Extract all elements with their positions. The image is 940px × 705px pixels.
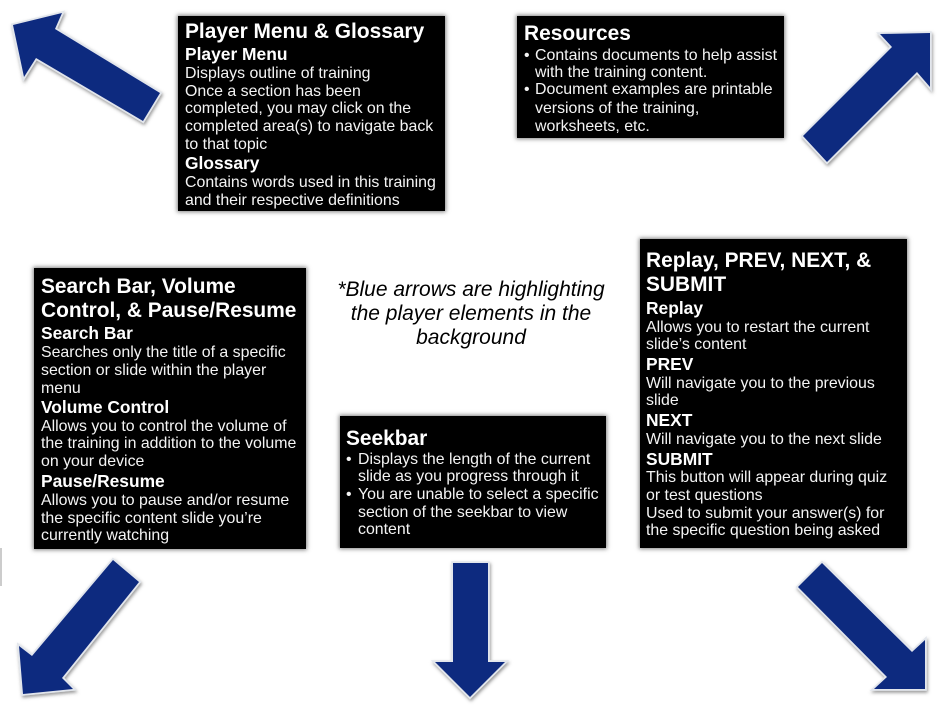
- text: pause/resume description: Allows you to pause and/or resume: [41, 492, 289, 509]
- bullet list: seekbar: slide as you progress through it: [358, 468, 579, 485]
- text: submit description: the specific question being asked: [646, 522, 880, 539]
- text: submit description: [646, 469, 887, 539]
- bullet list: seekbar: content: [358, 521, 410, 538]
- panel: Player Menu & Glossary: [178, 16, 445, 211]
- panel: Replay, PREV, NEXT, & SUBMIT: [640, 239, 907, 548]
- bullet list: resources: with the training content.: [535, 64, 707, 81]
- text: pause/resume description: currently watching: [41, 527, 169, 544]
- text: next description: Will navigate you to the next slide: [646, 431, 882, 448]
- heading: Player Menu & Glossary: Player Menu & Glossary: [185, 20, 424, 43]
- text: volume control description: on your device: [41, 453, 144, 470]
- bullet list: resources: [524, 47, 777, 135]
- bullet list: resources: worksheets, etc.: [535, 118, 650, 135]
- text: player menu description: completed, you may click on the: [185, 100, 411, 117]
- text: glossary description: and their respective definitions: [185, 192, 400, 209]
- arrow: bottom right: [798, 563, 925, 689]
- bullet list: seekbar: •: [346, 486, 352, 503]
- arrow: top left: [13, 13, 160, 121]
- text: submit description: Used to submit your answer(s) for: [646, 505, 884, 522]
- bullet list: resources: versions of the training,: [535, 100, 699, 117]
- subheading: Replay: Replay: [646, 298, 703, 318]
- text: submit description: This button will appear during quiz: [646, 469, 887, 486]
- heading: Resources: Resources: [524, 22, 631, 45]
- bullet list: resources: Contains documents to help assist: [535, 47, 777, 64]
- text: player menu description: Displays outline of training: [185, 65, 370, 82]
- text: search bar description: section or slide within the player: [41, 362, 266, 379]
- heading: Search Bar, Volume Control, & Pause/Resume: [41, 275, 296, 322]
- bullet list: seekbar: You are unable to select a specific: [358, 486, 599, 503]
- heading: Replay, PREV, NEXT, & SUBMIT: [646, 249, 871, 296]
- bullet list: resources: •: [524, 47, 530, 64]
- text: pause/resume description: the specific content slide you’re: [41, 510, 262, 527]
- panel: Seekbar: [340, 416, 606, 548]
- subheading: SUBMIT: SUBMIT: [646, 449, 713, 469]
- text: search bar description: Searches only the title of a specific: [41, 344, 286, 361]
- text: prev description: slide: [646, 392, 679, 409]
- text: replay description: slide’s content: [646, 336, 746, 353]
- text: submit description: or test questions: [646, 487, 763, 504]
- heading: Replay, PREV, NEXT, & SUBMIT: SUBMIT: [646, 273, 726, 296]
- note: blue arrows: [337, 278, 605, 349]
- heading: Search Bar, Volume Control, & Pause/Resume: Control, & Pause/Resume: [41, 299, 296, 322]
- bullet list: resources: Document examples are printable: [535, 81, 773, 98]
- text: glossary description: Contains words used in this training: [185, 174, 436, 191]
- bullet list: seekbar: •: [346, 451, 352, 468]
- text: volume control description: [41, 418, 296, 470]
- bullet list: resources: •: [524, 81, 530, 98]
- heading: Seekbar: Seekbar: [346, 427, 427, 450]
- text: search bar description: [41, 344, 286, 397]
- subheading: Player Menu: Player Menu: [185, 44, 287, 64]
- subheading: Search Bar: Search Bar: [41, 323, 133, 343]
- subheading: Pause/Resume: Pause/Resume: [41, 471, 165, 491]
- bullet list: seekbar: Displays the length of the current: [358, 451, 590, 468]
- arrow: bottom center: [435, 563, 505, 697]
- subheading: NEXT: NEXT: [646, 410, 692, 430]
- subheading: Glossary: Glossary: [185, 153, 259, 173]
- text: pause/resume description: [41, 492, 289, 544]
- heading: Search Bar, Volume Control, & Pause/Resume: Search Bar, Volume: [41, 275, 236, 298]
- text: glossary description: [185, 174, 436, 209]
- heading: Replay, PREV, NEXT, & SUBMIT: Replay, PREV, NEXT, &: [646, 249, 871, 272]
- note: blue arrows: *Blue arrows are highlighting: [337, 278, 605, 301]
- text: player menu description: completed area(s) to navigate back: [185, 118, 433, 135]
- note: blue arrows: background: [416, 326, 526, 349]
- bullet list: seekbar: section of the seekbar to view: [358, 504, 567, 521]
- arrow: bottom left: [19, 560, 139, 694]
- bullet list: seekbar: [346, 451, 599, 538]
- panel: Resources: [517, 16, 784, 138]
- panel: Search Bar, Volume Control, & Pause/Resume: [34, 268, 306, 549]
- subheading: Volume Control: Volume Control: [41, 397, 169, 417]
- text: volume control description: the training in addition to the volume: [41, 435, 296, 452]
- arrow: top right: [803, 33, 930, 162]
- text: replay description: [646, 319, 870, 353]
- text: search bar description: menu: [41, 380, 81, 397]
- text: prev description: [646, 375, 875, 409]
- text: player menu description: to that topic: [185, 136, 267, 153]
- note: blue arrows: the player elements in the: [351, 302, 591, 325]
- text: prev description: Will navigate you to the previous: [646, 375, 875, 392]
- text: volume control description: Allows you to control the volume of: [41, 418, 287, 435]
- text: player menu description: Once a section has been: [185, 83, 361, 100]
- text: player menu description: [185, 65, 434, 153]
- subheading: PREV: PREV: [646, 354, 693, 374]
- text: replay description: Allows you to restart the current: [646, 319, 869, 336]
